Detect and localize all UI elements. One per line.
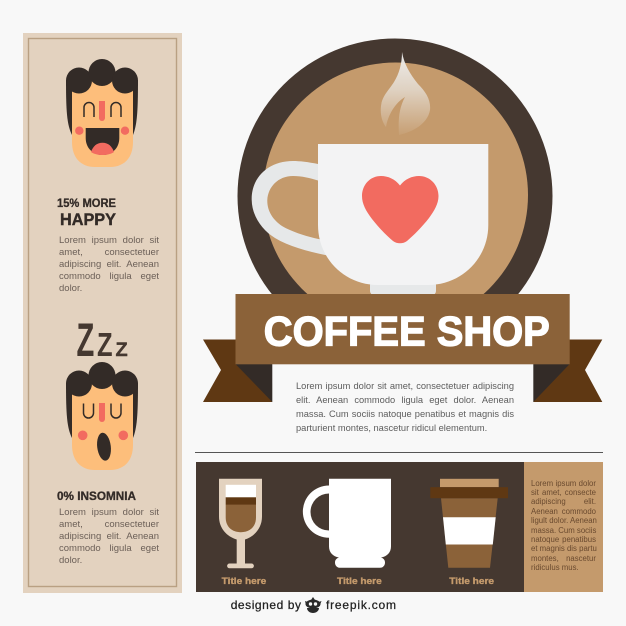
text block: insomnia description (59, 507, 159, 566)
icon: takeaway cup (430, 478, 508, 586)
footer: credit (231, 597, 396, 613)
credit: designed by: designed by (231, 598, 301, 612)
heading: happy: HAPPY (60, 211, 116, 229)
text block: intro paragraph: massa. Cum sociis natoque penatibus et magnis dis (296, 409, 514, 419)
text block: insomnia description: amet, consectetuer (59, 519, 159, 530)
text block: insomnia description: adipiscing elit. Aenean (59, 531, 159, 542)
text block: happy description: amet, consectetuer (59, 247, 159, 258)
text block: intro paragraph: Lorem ipsum dolor sit amet, consectetuer adipiscing (296, 381, 514, 391)
icon: heart (362, 176, 438, 243)
icon: cup handle (252, 161, 330, 256)
text block: happy description: adipiscing elit. Aenean (59, 259, 159, 270)
faces and headings (28, 38, 178, 588)
ribbon band (236, 294, 570, 364)
title: COFFEE SHOP (264, 308, 550, 354)
ribbon tail: left (203, 340, 272, 402)
text block: side description: massa. Cum sociis (531, 526, 596, 535)
text block: intro paragraph: parturient montes, nascetur ridicul elementum. (296, 423, 487, 433)
text block: side description (531, 478, 597, 572)
icon: zzz: Z (97, 327, 113, 364)
text block: side description: Lorem ipsum dolor (531, 478, 596, 488)
text block: side description: et magnis dis partu (531, 544, 597, 553)
text block: insomnia description: Lorem ipsum dolor sit (59, 507, 159, 518)
ribbon fold: left (236, 364, 272, 402)
label: title 2: Title here (337, 576, 382, 586)
text block: intro paragraph (296, 381, 514, 433)
banner: coffee shop ribbon (203, 294, 602, 402)
text block: side description: natoque penatibus (531, 535, 596, 544)
panel: product strip (196, 462, 524, 592)
text block: happy description (59, 235, 159, 294)
icon: zzz: Z (76, 315, 94, 367)
text block: side description: sit amet, consecte (531, 488, 596, 497)
text block: insomnia description: dolor. (59, 555, 82, 566)
icon: cup body (318, 144, 488, 285)
badge: coffee cup emblem (238, 38, 552, 294)
icon: zzz (76, 315, 128, 367)
heading: 15% more: 15% MORE (57, 196, 116, 210)
text block: insomnia description: commodo ligula eget (59, 543, 159, 554)
heading: 0% insomnia: 0% INSOMNIA (57, 489, 136, 503)
label: title 3: Title here (449, 576, 494, 586)
text block: side description: adipiscing elit. (531, 497, 596, 506)
panel: left benefits column (23, 33, 182, 593)
icon: coffee glass (219, 478, 266, 586)
panel: tan text box (524, 462, 603, 592)
label: title 1: Title here (222, 576, 266, 586)
text block: happy description: commodo ligula eget (59, 271, 159, 282)
icon: sleeping face (66, 362, 138, 470)
icon: freepik logo (305, 597, 322, 613)
credit: freepik.com: freepik.com (326, 598, 396, 612)
icon: steam (381, 52, 430, 135)
ribbon tail: right (533, 340, 602, 402)
icon: zzz: Z (116, 339, 128, 361)
text block: side description: Aenean commodo (531, 507, 596, 516)
text block: intro paragraph: elit. Aenean commodo ligula eget dolor. Aenean (296, 395, 514, 405)
text block: happy description: Lorem ipsum dolor sit (59, 235, 159, 246)
text block: side description: ridiculus mus. (531, 563, 579, 572)
icon: cup foot (370, 281, 436, 295)
icon: mug (303, 478, 391, 586)
ribbon fold: right (533, 364, 570, 402)
text block: side description: ligult dolor. Aenean (531, 516, 597, 525)
icon: happy face (66, 59, 138, 167)
text block: side description: montes, nascetur (531, 554, 596, 563)
text block: happy description: dolor. (59, 283, 82, 294)
